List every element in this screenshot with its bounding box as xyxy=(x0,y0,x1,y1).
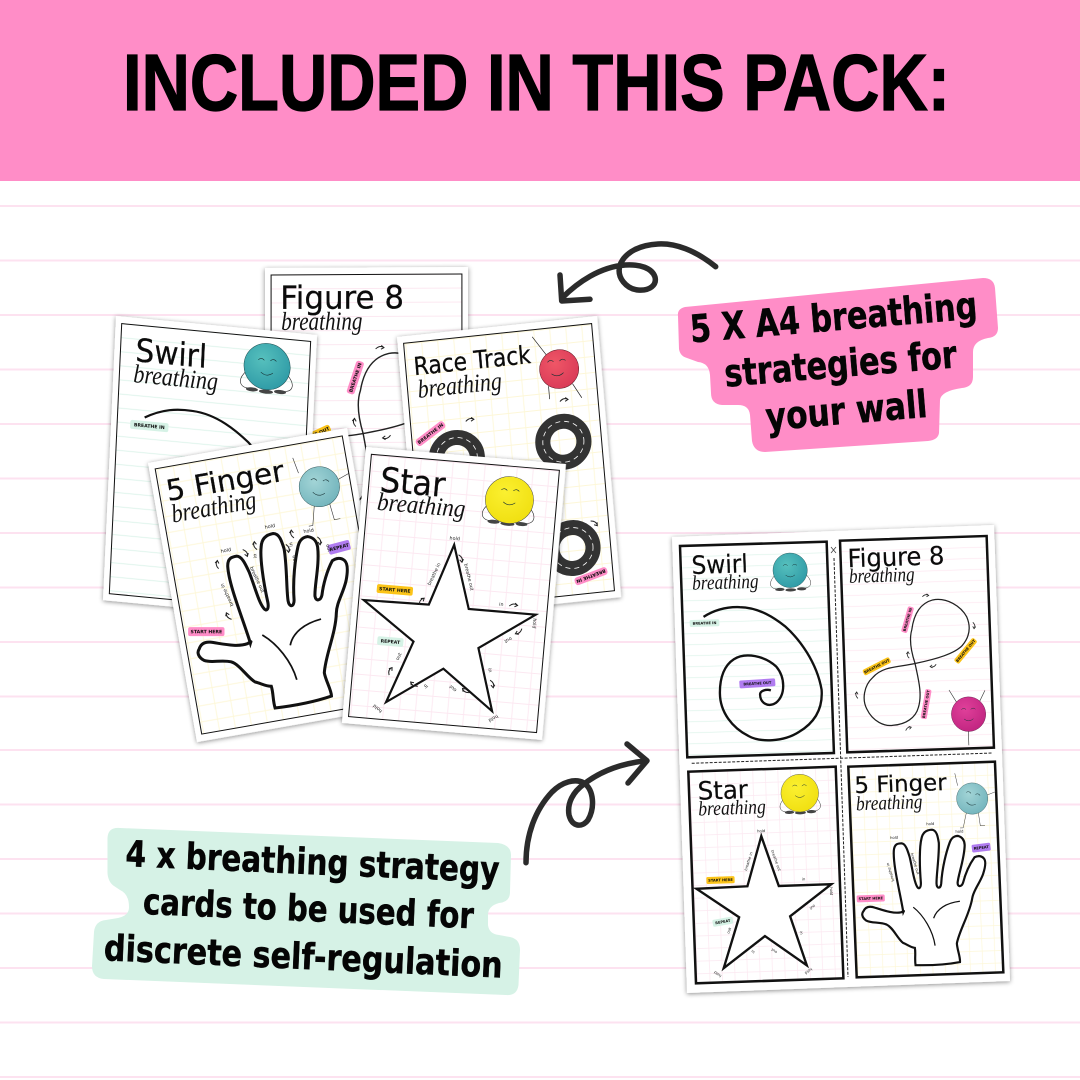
card: Star: in xyxy=(802,877,806,881)
callout: breathing cards xyxy=(92,828,520,995)
card cut lines xyxy=(692,558,993,977)
A4 sheet: 5 Finger: out xyxy=(324,544,332,553)
A4 sheet: Race Track: BREATHE IN xyxy=(575,567,606,584)
A4 sheet: 5 Finger: out xyxy=(290,555,298,564)
card: Star: out xyxy=(726,927,732,934)
card: Star: in xyxy=(799,931,804,936)
A4 sheet: Figure 8: Figure 8 xyxy=(280,279,404,317)
A4 sheet: Star: REPEAT xyxy=(380,638,401,646)
A4 sheet: Star: hold xyxy=(449,536,460,542)
A4 sheet: Star: breathing xyxy=(376,487,467,523)
callout: breathing cards: 4 x breathing strategy xyxy=(125,834,500,891)
A4 sheet: 5 Finger: breathe out xyxy=(248,566,265,594)
card: Swirl: BREATHE OUT xyxy=(743,681,772,687)
card: Figure 8: BREATHE IN xyxy=(903,608,913,632)
A4 sheet: Star: out xyxy=(503,635,513,644)
card: Star: in xyxy=(750,949,756,954)
A4 sheet: Race Track: breathing xyxy=(416,366,503,404)
card: Figure 8: BREATHE OUT xyxy=(922,689,931,718)
card sheet xyxy=(672,525,1010,993)
A4 sheet: Figure 8: breathing xyxy=(281,307,362,336)
card: Star xyxy=(688,767,843,983)
A4 sheet: Race Track xyxy=(397,316,621,618)
callout: A4 strategies xyxy=(678,278,998,452)
card: Star: out xyxy=(808,903,816,911)
card: Star: START HERE xyxy=(708,878,733,883)
card: Swirl: breathing xyxy=(692,571,759,595)
card: Star: out xyxy=(770,947,778,954)
card: 5 Finger: hold xyxy=(955,830,964,834)
A4 sheet: Swirl: Swirl xyxy=(135,331,208,376)
callout: breathing cards: discrete self-regulation xyxy=(103,928,504,987)
card: 5 Finger: breathe out xyxy=(910,853,920,875)
A4 sheet: 5 Finger: 5 Finger xyxy=(163,454,287,508)
A4 sheet: Swirl: BREATHE IN xyxy=(134,422,165,431)
card: Star: hold xyxy=(803,967,813,975)
A4 sheet: 5 Finger: REPEAT xyxy=(329,542,350,553)
A4 sheet: 5 Finger xyxy=(148,428,396,742)
card: Star: hold xyxy=(829,887,833,896)
callout: A4 strategies: your wall xyxy=(764,382,929,439)
card: Star: hold xyxy=(757,829,766,833)
A4 sheet: 5 Finger: hold xyxy=(264,523,276,531)
A4 sheet: Race Track: BREATHE IN xyxy=(417,422,445,446)
card: Star: breathe out xyxy=(770,850,782,872)
A4 sheet: 5 Finger: in xyxy=(288,542,295,547)
header band xyxy=(0,0,1080,181)
A4 sheet: Star: in xyxy=(423,682,430,689)
card: Figure 8: BREATHE OUT xyxy=(955,639,977,663)
card: 5 Finger: breathing xyxy=(856,791,923,815)
A4 sheet: 5 Finger: hold xyxy=(303,527,314,535)
A4 sheet: Figure 8 xyxy=(265,267,468,551)
card: Star: hold xyxy=(713,970,722,978)
A4 sheet: 5 Finger: START HERE xyxy=(190,629,222,635)
card: Star: breathe in xyxy=(744,851,754,871)
A4 sheet: 5 Finger: in xyxy=(252,553,259,559)
A4 sheet: Figure 8: BREATHE IN xyxy=(348,362,364,393)
arrow: to cards xyxy=(526,744,647,863)
A4 sheet: Star: Star xyxy=(378,461,448,506)
card: 5 Finger: hold xyxy=(926,822,935,826)
A4 sheet: Race Track: Race Track xyxy=(412,340,532,381)
card: Star: breathing xyxy=(698,796,766,820)
card: Swirl xyxy=(680,542,834,757)
A4 sheet: Star: breathe out xyxy=(462,563,475,591)
A4 sheet: Swirl xyxy=(103,316,317,619)
card: 5 Finger: breathe in xyxy=(886,862,895,882)
A4 sheet: Star: hold xyxy=(372,703,384,714)
A4 sheet: 5 Finger: breathe in xyxy=(220,582,235,607)
scissors mark xyxy=(831,547,836,553)
card: Figure 8: breathing xyxy=(849,564,915,588)
A4 sheet: Swirl: breathing xyxy=(133,359,219,396)
card: 5 Finger: START HERE xyxy=(858,896,884,901)
A4 sheet: Star: in xyxy=(499,602,504,608)
A4 sheet: 5 Finger: hold xyxy=(220,547,232,555)
callout: A4 strategies: strategies for xyxy=(723,332,959,396)
A4 sheet: Figure 8: BREATHE OUT xyxy=(295,426,331,447)
A4 sheet: Star: out xyxy=(448,683,458,693)
A4 sheet: Star: hold xyxy=(531,618,537,629)
A4 sheet: Star xyxy=(342,447,566,740)
card: Swirl: BREATHE IN xyxy=(693,621,717,626)
card: Swirl: Swirl xyxy=(691,549,748,580)
A4 sheet: Star: in xyxy=(486,668,493,673)
callout: breathing cards: cards to be used for xyxy=(142,882,475,937)
card: 5 Finger: REPEAT xyxy=(973,845,990,851)
card: 5 Finger xyxy=(848,762,1003,977)
arrow: to A4 sheets xyxy=(560,244,716,301)
A4 sheet: Star: out xyxy=(395,652,404,661)
card: 5 Finger: hold xyxy=(890,836,899,840)
card: Star: REPEAT xyxy=(715,919,731,925)
card: Figure 8: Figure 8 xyxy=(847,541,945,573)
card: Star: Star xyxy=(697,775,749,806)
A4 sheet: Star: hold xyxy=(487,713,499,723)
A4 sheet: 5 Finger: breathing xyxy=(169,485,258,529)
A4 sheet: Star: START HERE xyxy=(379,586,411,595)
card: 5 Finger: 5 Finger xyxy=(854,770,948,799)
callout: A4 strategies: 5 X A4 breathing xyxy=(688,283,979,351)
card: Figure 8 xyxy=(840,536,994,752)
A4 sheet: Star: breathe in xyxy=(427,562,442,586)
card: Figure 8: BREATHE OUT xyxy=(863,658,891,675)
